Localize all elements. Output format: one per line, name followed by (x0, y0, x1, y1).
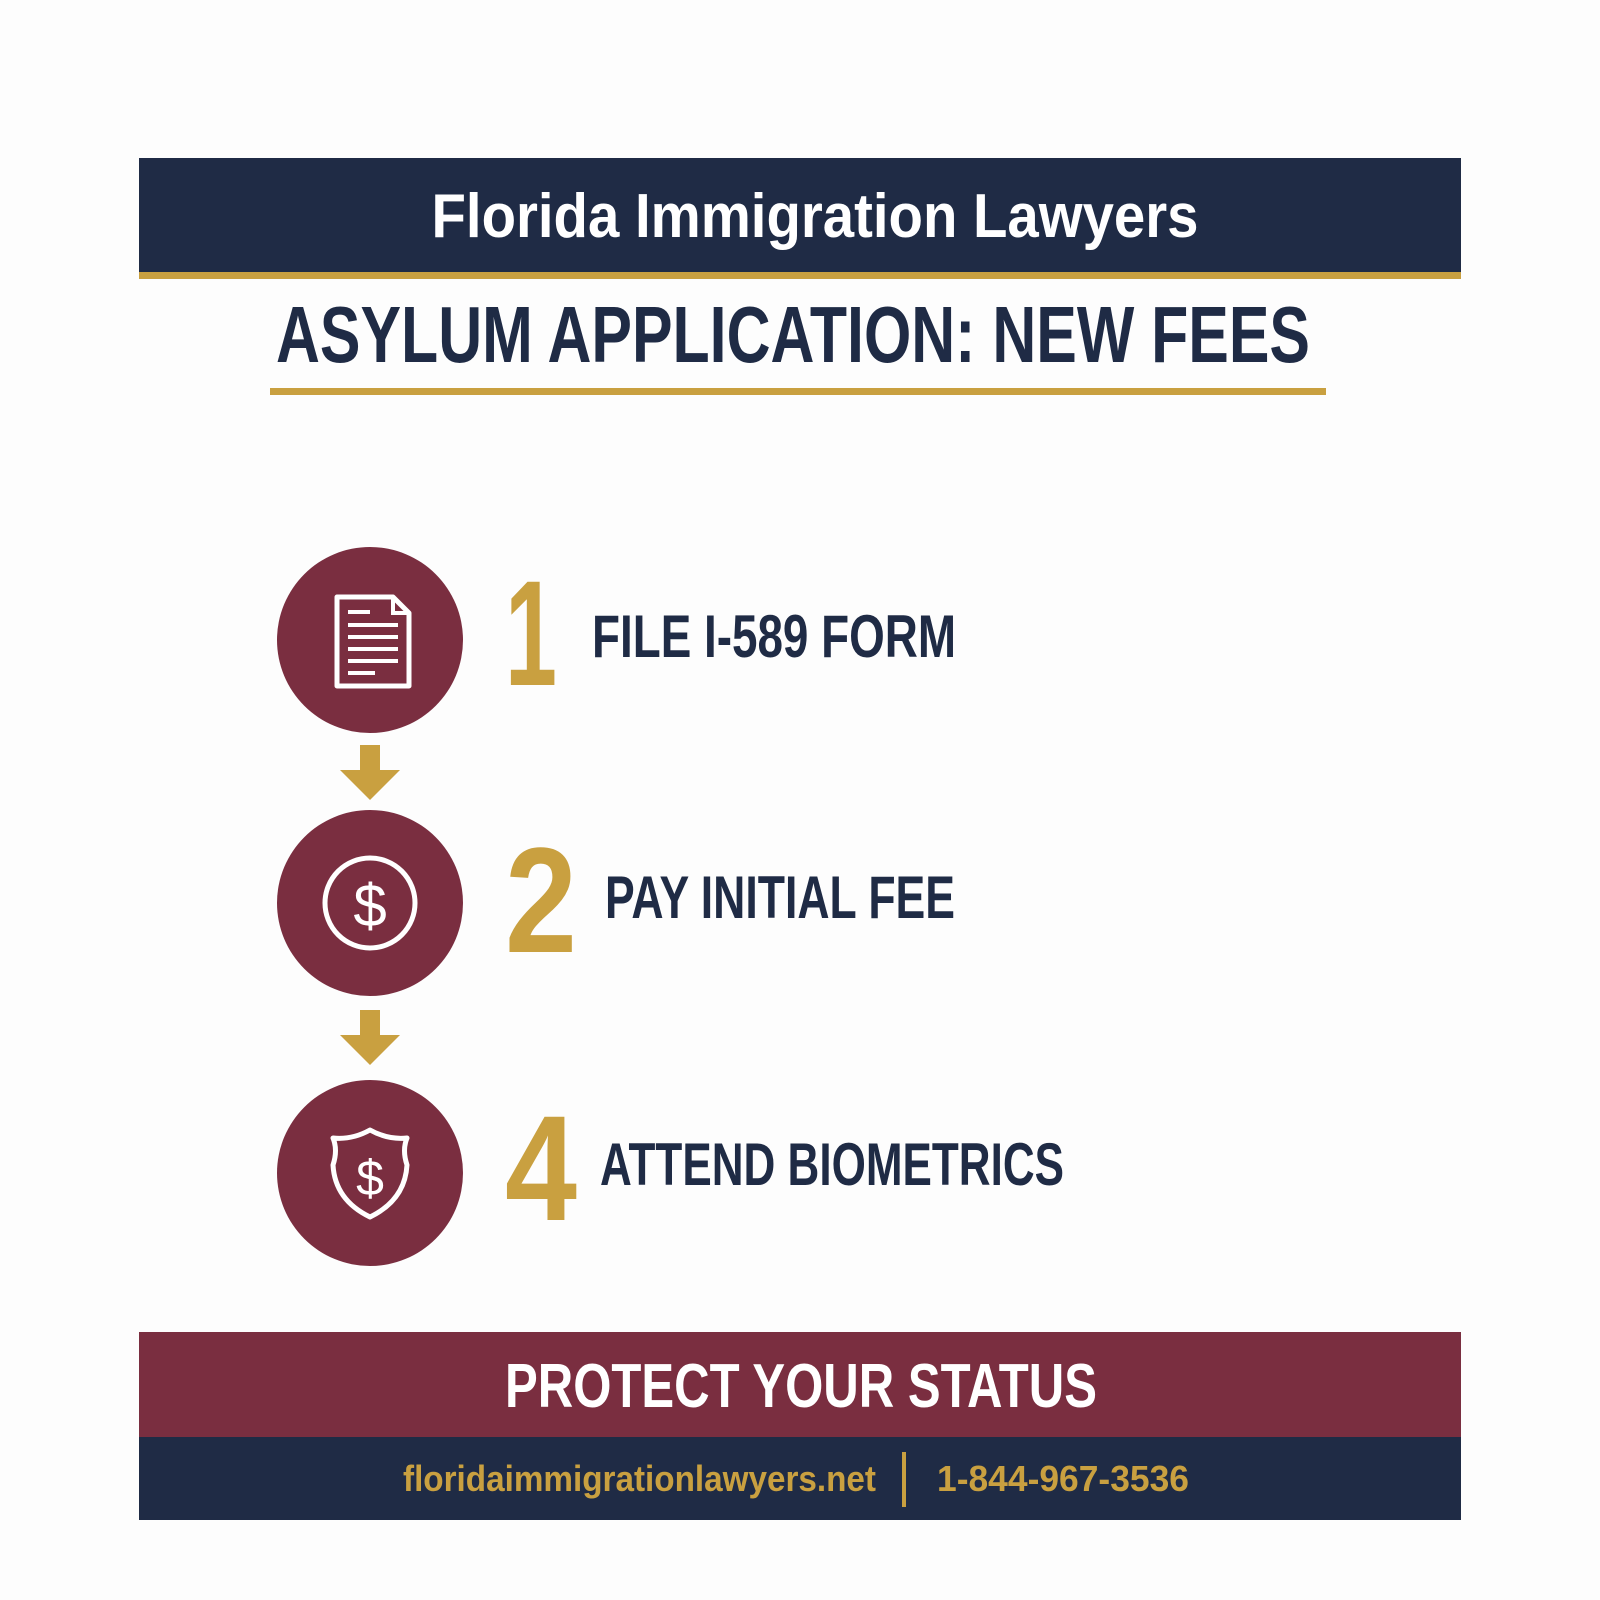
header bar (139, 158, 1461, 279)
contact bar: 1-844-967-3536 (937, 1458, 1189, 1499)
number 1: 1 (505, 549, 557, 717)
step 2 (277, 810, 955, 996)
icon: shield dollar (277, 1080, 463, 1266)
contact bar: floridaimmigrationlawyers.net (403, 1458, 876, 1499)
step 1 (277, 547, 956, 733)
arrow 1 (340, 745, 400, 800)
footer banner: PROTECT YOUR STATUS (505, 1352, 1097, 1421)
step 3 label: ATTEND BIOMETRICS (600, 1131, 1064, 1198)
header text: Florida Immigration Lawyers (432, 182, 1198, 251)
footer banner (139, 1332, 1461, 1438)
step 3 (277, 1080, 1064, 1266)
icon: dollar coin: $ (353, 872, 387, 939)
icon: dollar coin (277, 810, 463, 996)
arrow 2 (340, 1010, 400, 1065)
title: ASYLUM APPLICATION: NEW FEES (276, 290, 1310, 379)
icon: shield dollar: $ (356, 1150, 384, 1206)
step 1 label: FILE I-589 FORM (592, 603, 956, 670)
title (270, 290, 1326, 395)
number 4: 4 (505, 1084, 577, 1252)
step 2 label: PAY INITIAL FEE (605, 864, 955, 931)
icon: document (277, 547, 463, 733)
contact bar (139, 1437, 1461, 1520)
number 2: 2 (505, 816, 577, 984)
